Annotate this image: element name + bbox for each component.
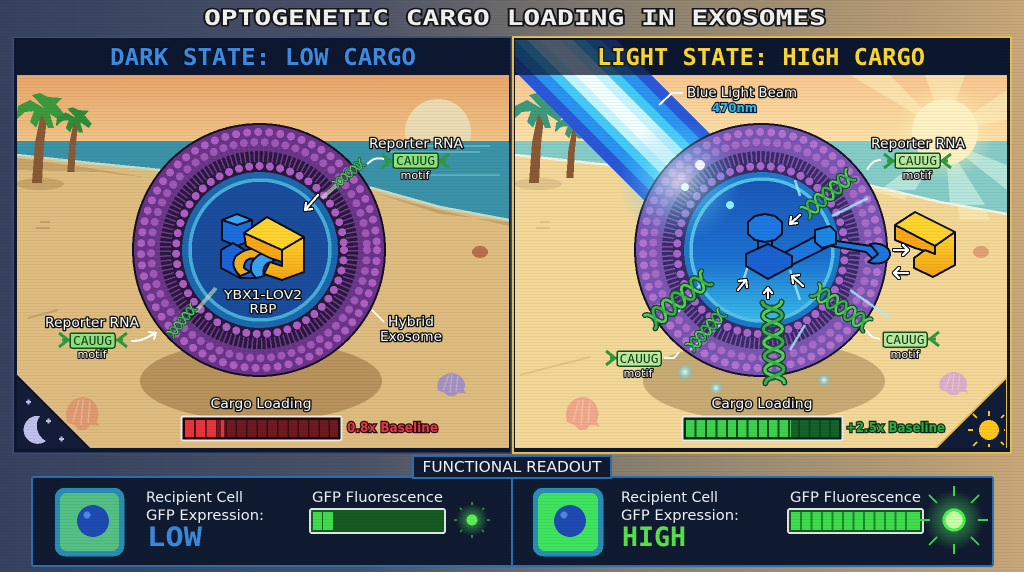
beach scene: light [515, 40, 1007, 448]
gauge: gfp high [788, 509, 923, 533]
callout: reporter rna bottom [45, 316, 156, 361]
text: recipient cell high [621, 490, 739, 553]
rna fragment top: dark [305, 159, 365, 210]
text: recipient cell low: Recipient Cell [146, 490, 243, 506]
text: recipient cell low [146, 490, 264, 553]
callout: hybrid exosome: Hybrid [388, 315, 434, 330]
value: +2.5x baseline: +2.5x Baseline [846, 421, 945, 436]
icon: glow high [920, 486, 988, 554]
arrows toward protein [738, 215, 908, 298]
protein: open conformation [746, 214, 890, 279]
callout: reporter rna bottom: CAUUG [73, 334, 112, 348]
light state heading: LIGHT STATE: HIGH CARGO [597, 45, 925, 71]
label: gfp fluorescence high: GFP Fluorescence [790, 490, 921, 506]
panel: functional readout [32, 456, 993, 566]
dark state heading: DARK STATE: LOW CARGO [110, 45, 416, 71]
shell: orange [566, 397, 600, 430]
callout: reporter rna top [867, 137, 965, 182]
callout: blue light beam [659, 86, 797, 115]
icon: recipient cell high [532, 487, 604, 557]
text: recipient cell low: LOW [147, 522, 203, 553]
panel: light state [512, 36, 1012, 454]
sand marks [28, 222, 58, 318]
callout: reporter rna bottom: motif [78, 348, 108, 361]
tab: functional readout: FUNCTIONAL READOUT [422, 458, 602, 476]
callout: cauug lower right [866, 330, 939, 361]
label: YBX1-LOV2 RBP: RBP [250, 301, 277, 316]
exosome shadow [643, 350, 885, 416]
callout: cauug lower left [606, 351, 679, 380]
shell: orange [66, 397, 100, 430]
callout: hybrid exosome [372, 310, 442, 345]
text: recipient cell low: GFP Expression: [146, 508, 264, 524]
value: 0.8x baseline: 0.8x Baseline [347, 421, 438, 436]
icon: recipient cell low [54, 487, 125, 557]
exosome: dark [132, 123, 386, 377]
callout: blue light beam: Blue Light Beam [687, 86, 797, 101]
panel: dark state [13, 37, 511, 453]
gauge: light cargo [682, 416, 842, 440]
badge: sun [935, 377, 1007, 449]
yellow cargo block [895, 212, 955, 277]
callout: cauug lower left: CAUUG [620, 352, 658, 366]
text: recipient cell high: Recipient Cell [621, 490, 718, 506]
exosome shadow [140, 350, 382, 416]
gauge: dark cargo [182, 416, 342, 440]
callout: reporter rna top: Reporter RNA [871, 137, 965, 152]
label: cargo loading dark: Cargo Loading [210, 397, 312, 412]
label: gfp fluorescence low: GFP Fluorescence [312, 490, 443, 506]
callout: reporter rna top: Reporter RNA [369, 137, 463, 152]
badge: moon [15, 374, 90, 449]
shell: purple [437, 373, 466, 396]
exosome: light [618, 118, 890, 395]
callout: reporter rna top: CAUUG [396, 154, 435, 168]
callout: reporter rna bottom: Reporter RNA [45, 316, 139, 331]
label: YBX1-LOV2 RBP: YBX1-LOV2 [223, 287, 302, 302]
callout: blue light beam: 470nm [712, 101, 757, 115]
text: recipient cell high: GFP Expression: [621, 508, 739, 524]
callout: reporter rna top: CAUUG [898, 154, 937, 168]
beach scene: dark [15, 75, 509, 449]
rna fragment bottom: dark [167, 288, 216, 338]
label: YBX1-LOV2 RBP [223, 287, 302, 316]
sand marks [520, 222, 590, 375]
callout: reporter rna top [367, 137, 463, 182]
callout: reporter rna top: motif [902, 169, 933, 182]
title: OPTOGENETIC CARGO LOADING IN EXOSOMES [204, 6, 826, 30]
text: recipient cell high: HIGH [622, 522, 686, 553]
label: cargo loading light: Cargo Loading [712, 397, 812, 412]
callout: cauug lower right: motif [890, 348, 921, 361]
rna strands in exosome [645, 169, 871, 383]
shell: purple [939, 372, 968, 395]
protein: closed complex [221, 214, 304, 280]
callout: cauug lower left: motif [624, 367, 654, 380]
blue light beam [515, 40, 710, 200]
light state header [515, 40, 1007, 75]
icon: glow low [454, 502, 490, 538]
gauge: gfp low [310, 509, 445, 533]
callout: cauug lower right: CAUUG [886, 333, 924, 347]
callout: reporter rna top: motif [400, 169, 431, 182]
callout: hybrid exosome: Exosome [380, 330, 442, 345]
